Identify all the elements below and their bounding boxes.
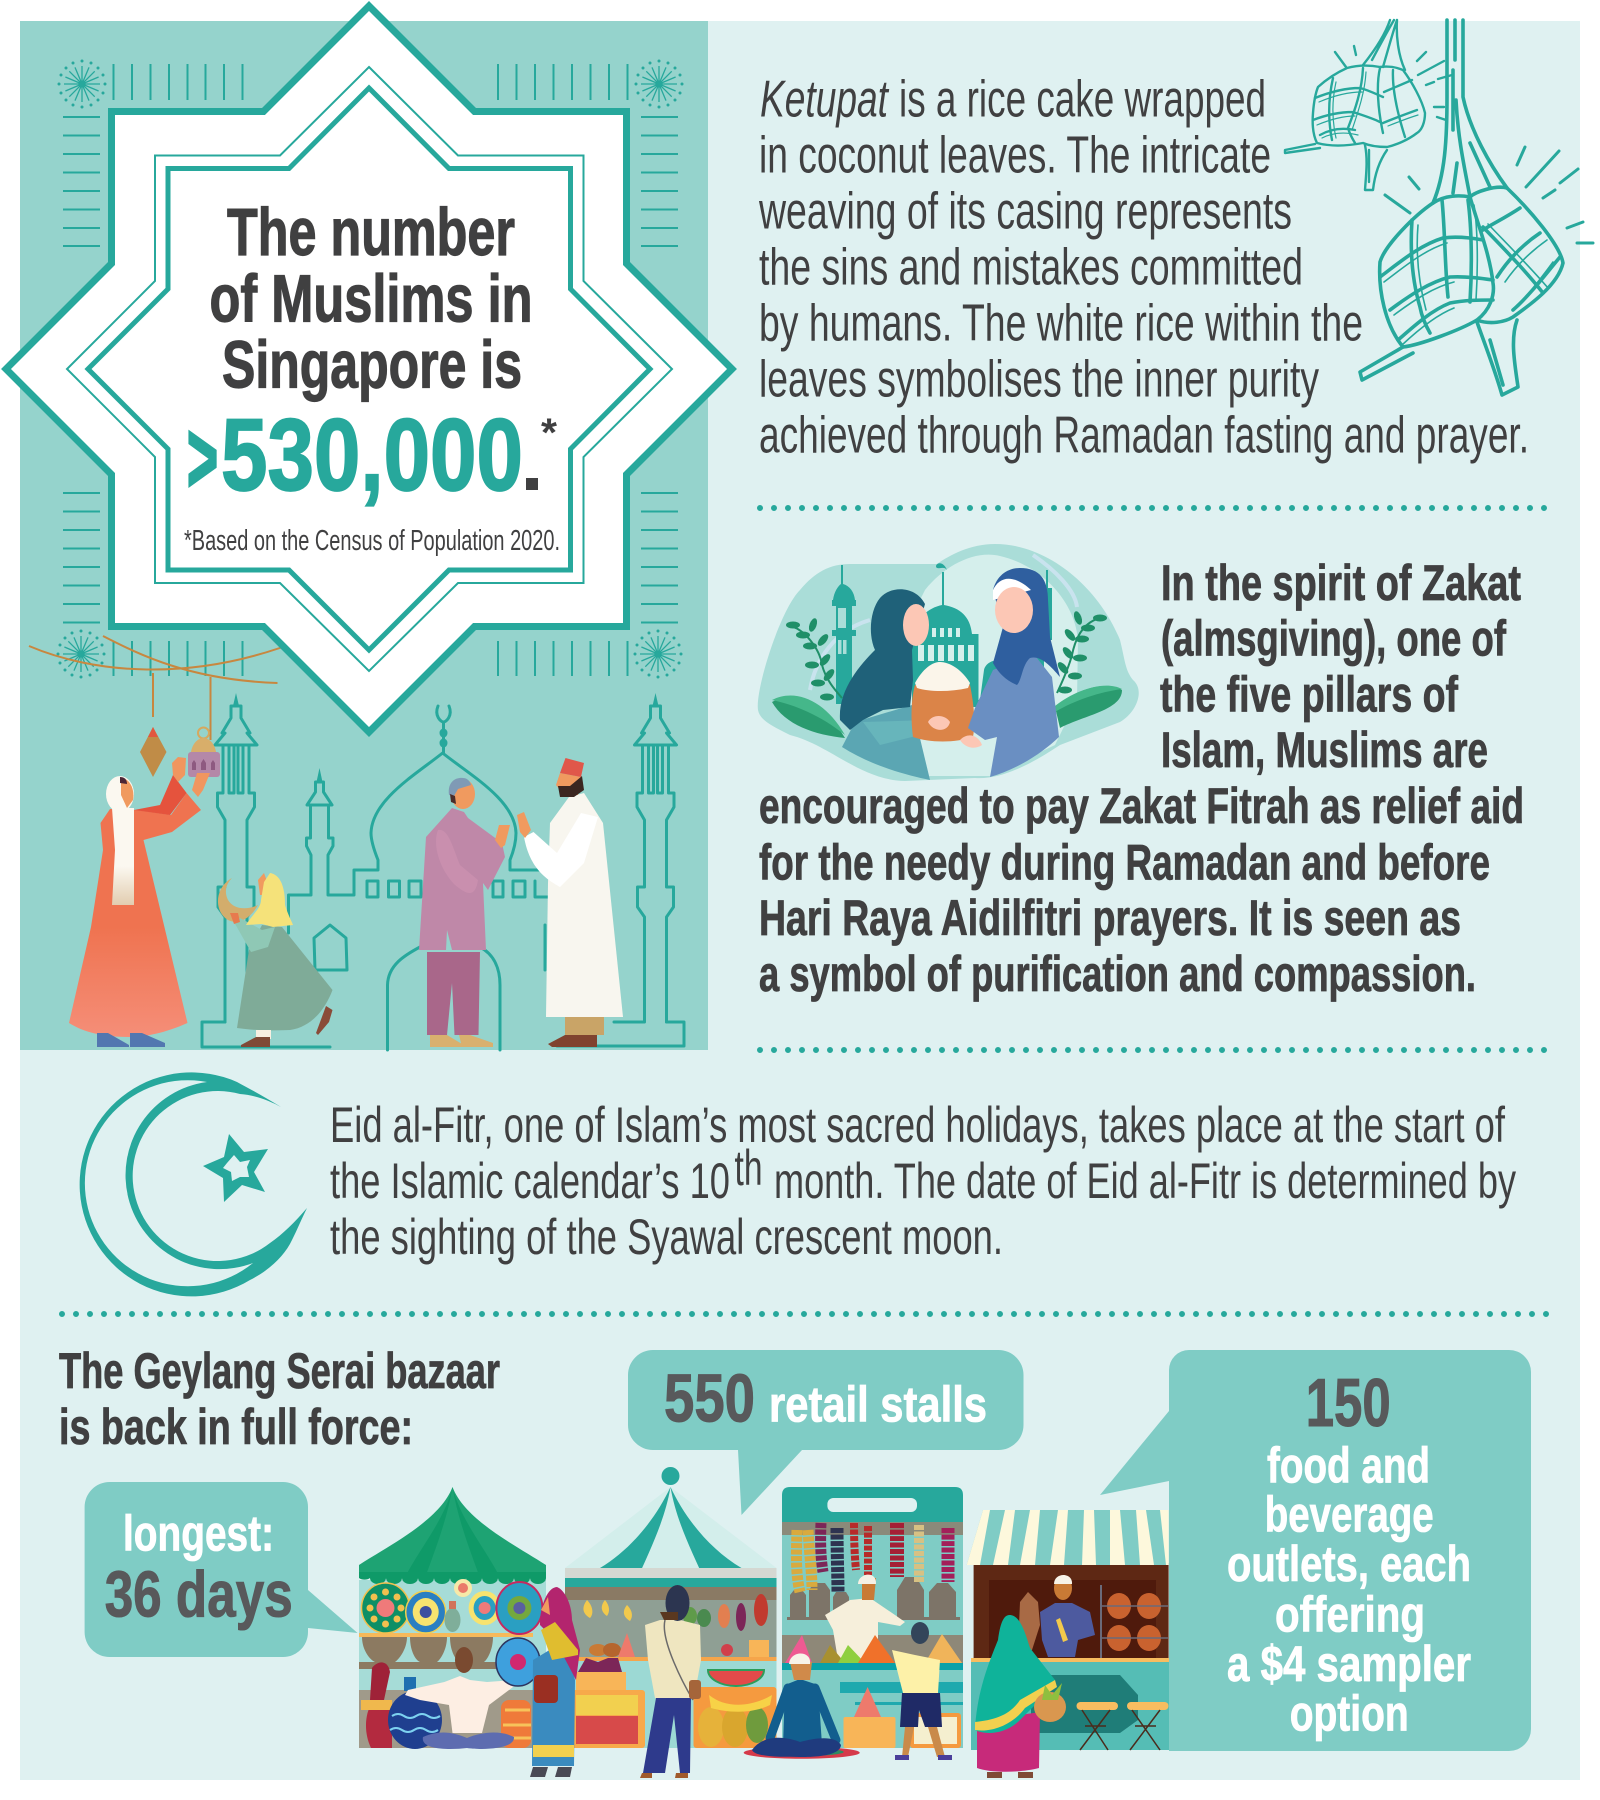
statistic: 530,000: 530,000 bbox=[221, 398, 523, 512]
statistic: 530,000: * bbox=[541, 411, 557, 455]
vendor bbox=[825, 1575, 905, 1660]
statistic: 530,000: > bbox=[187, 402, 218, 514]
panel: teal illustration bbox=[20, 21, 708, 1050]
text: Eid al-Fitr paragraph bbox=[330, 1097, 1516, 1265]
bubble: 150 food and beverage outlets: food and bbox=[1267, 1438, 1430, 1494]
text: zakat paragraph bbox=[759, 555, 1524, 1002]
woman in green and magenta bbox=[975, 1615, 1066, 1778]
woman with blue hijab bbox=[960, 568, 1060, 777]
hanging spices bbox=[796, 1523, 948, 1593]
icon: hanging lantern bbox=[188, 728, 220, 777]
woman with teal hijab bbox=[840, 589, 932, 780]
bubble: 550 retail stalls: retail stalls bbox=[769, 1377, 987, 1433]
stools bbox=[1076, 1702, 1168, 1750]
stall 3: spices bbox=[744, 1487, 963, 1760]
heading: Geylang Serai bazaar: The Geylang Serai bazaar bbox=[59, 1343, 500, 1399]
hanging produce bbox=[583, 1594, 769, 1657]
icon: hanging ketupat bbox=[1285, 20, 1593, 395]
bubble: 150 food and beverage outlets: offering bbox=[1275, 1587, 1425, 1643]
text: ketupat paragraph: is a rice cake wrapped bbox=[899, 71, 1266, 129]
figure: woman in orange bbox=[69, 757, 210, 1047]
mosque silhouette bbox=[832, 563, 1052, 707]
icon: crescent and star bbox=[80, 1072, 307, 1296]
text: ketupat paragraph: Ketupat bbox=[760, 71, 890, 129]
produce and boxes bbox=[844, 1717, 896, 1748]
bubble: 150 food and beverage outlets: 150 bbox=[1306, 1365, 1391, 1441]
text: ketupat paragraph: weaving of its casing represents bbox=[758, 182, 1292, 240]
bottles bbox=[790, 1577, 956, 1617]
stall 4: food bbox=[967, 1510, 1169, 1778]
figure: girl with crescent bbox=[218, 873, 332, 1047]
text: Eid al-Fitr paragraph: th bbox=[734, 1140, 762, 1196]
footnote: *Based on the Census of Population 2020. bbox=[184, 525, 560, 557]
pale arcs bbox=[810, 555, 1077, 690]
text: zakat paragraph: Islam, Muslims are bbox=[1161, 722, 1488, 778]
figure: man in purple bbox=[419, 778, 510, 1047]
bubble: 150 food and beverage outlets: outlets, each bbox=[1227, 1536, 1471, 1592]
bubble: 150 food and beverage outlets: beverage bbox=[1265, 1487, 1434, 1543]
string garland bbox=[29, 636, 304, 740]
chickens bbox=[1101, 1593, 1168, 1651]
heading: Geylang Serai bazaar: is back in full force: bbox=[59, 1399, 413, 1455]
bubble: longest 36 days bbox=[85, 1482, 358, 1657]
illustration: zakat giving bbox=[758, 544, 1139, 781]
text: zakat paragraph: the five pillars of bbox=[1160, 666, 1458, 722]
icon: diamond lantern bbox=[140, 727, 166, 777]
star headline: Singapore is bbox=[222, 328, 522, 402]
seated man and rug bbox=[744, 1654, 860, 1759]
rice sack bbox=[912, 662, 974, 742]
small ketupat bbox=[1285, 20, 1425, 190]
illustration: bazaar stalls bbox=[85, 1350, 1531, 1778]
text: ketupat paragraph bbox=[758, 71, 1529, 464]
seated vendor bbox=[361, 1638, 540, 1749]
text: ketupat paragraph: leaves symbolises the inner purity bbox=[759, 350, 1319, 408]
bubble: 550 retail stalls: 550 bbox=[664, 1361, 755, 1437]
star headline: of Muslims in bbox=[210, 262, 532, 336]
boy bbox=[892, 1622, 952, 1760]
fruit boxes bbox=[570, 1658, 776, 1748]
star headline bbox=[210, 195, 532, 402]
heading: Geylang Serai bazaar bbox=[59, 1343, 500, 1455]
leaves bbox=[772, 610, 1122, 738]
eight-point star bbox=[6, 6, 732, 732]
text: ketupat paragraph: by humans. The white rice within the bbox=[759, 294, 1363, 352]
star headline: The number bbox=[227, 195, 515, 270]
stall 2: teal tent bbox=[530, 1467, 1169, 1778]
text: ketupat paragraph: in coconut leaves. The intricate bbox=[759, 127, 1271, 185]
windows and arches bbox=[367, 881, 548, 897]
bubble: 550 retail stalls bbox=[628, 1350, 1024, 1515]
stall 1: green tent bbox=[85, 1350, 1531, 1778]
plates bbox=[362, 1579, 542, 1634]
text: Eid al-Fitr paragraph: the Islamic calendar’s 10 bbox=[330, 1153, 730, 1209]
dome finial bbox=[437, 706, 450, 753]
kebab and vendor bbox=[1019, 1592, 1040, 1650]
ornament: tick lines bbox=[63, 64, 678, 676]
mosque line art bbox=[202, 693, 684, 1050]
standing man bbox=[640, 1585, 701, 1778]
spice cones bbox=[785, 1635, 812, 1663]
small minaret bbox=[288, 753, 540, 933]
text: Eid al-Fitr paragraph: the sighting of the Syawal crescent moon. bbox=[330, 1209, 1003, 1265]
large ketupat rays bbox=[1385, 147, 1593, 243]
small ketupat rays bbox=[1335, 46, 1452, 120]
bubble: 150 food and beverage outlets: option bbox=[1290, 1686, 1409, 1742]
text: ketupat paragraph: the sins and mistakes committed bbox=[759, 238, 1303, 296]
bubble: longest 36 days: longest: bbox=[123, 1506, 274, 1562]
woman with magenta hijab bbox=[530, 1587, 580, 1777]
large ketupat bbox=[1360, 20, 1563, 395]
ornament: firework bursts bbox=[56, 60, 684, 678]
bubble: longest 36 days: 36 days bbox=[105, 1558, 293, 1631]
bubble: 150 food and beverage outlets bbox=[1100, 1350, 1531, 1751]
awning bbox=[967, 1510, 1169, 1565]
figure: man in white bbox=[517, 758, 623, 1047]
bubble: 150 food and beverage outlets: a $4 sampler bbox=[1227, 1636, 1471, 1692]
